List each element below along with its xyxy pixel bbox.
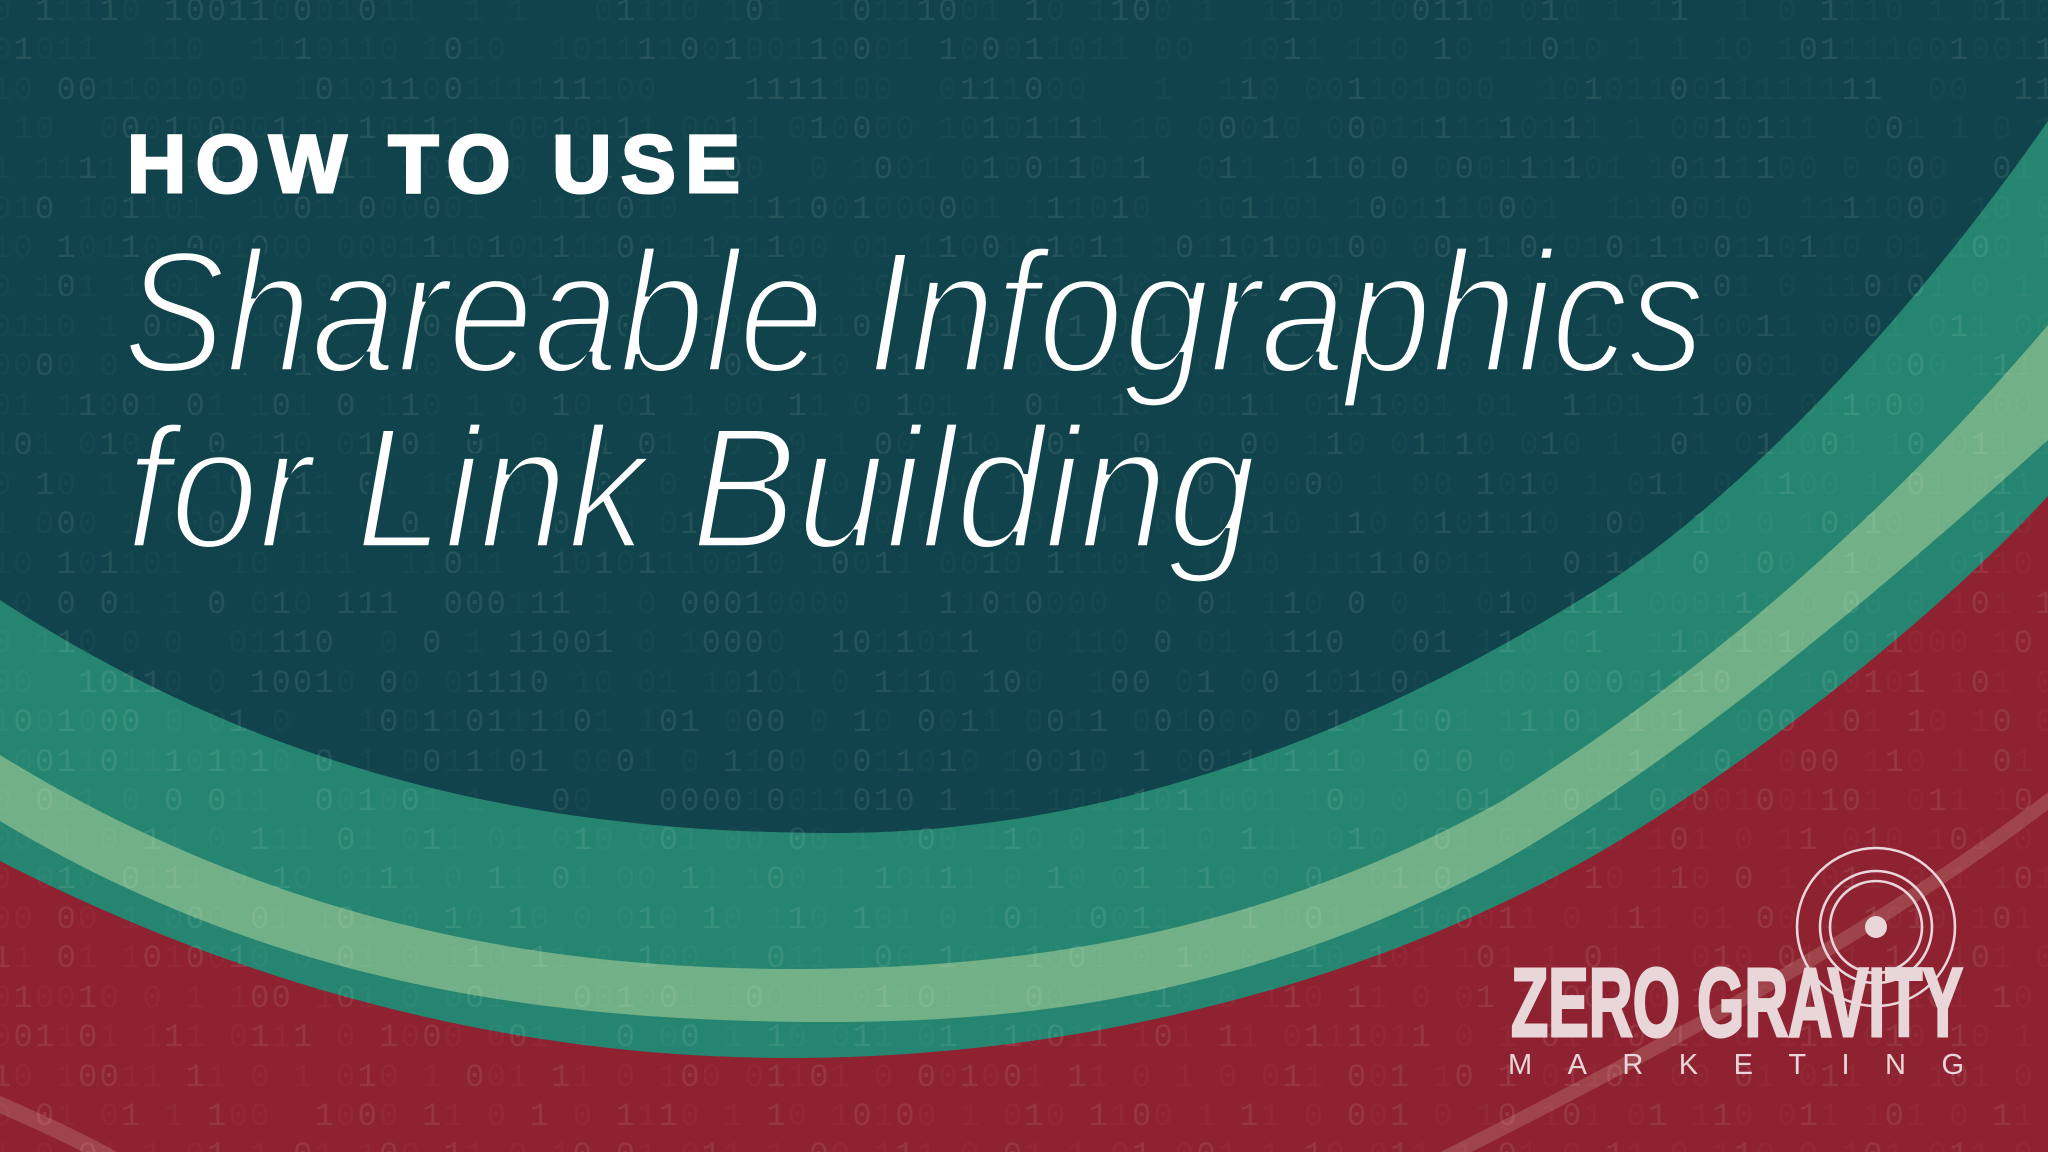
title: line one: Shareable Infographics xyxy=(123,214,1705,409)
logo subline: MARKETING xyxy=(1508,1049,1964,1081)
dark teal field xyxy=(0,0,2048,833)
heading: how to use: HOW TO USE xyxy=(127,119,740,210)
title: line two: for Link Building xyxy=(126,390,1256,585)
swoosh: faint arc bottom left xyxy=(0,1100,115,1152)
icon: logo target circles xyxy=(1797,848,1955,1006)
swoosh: faint arc bottom right xyxy=(1440,795,2048,1152)
logo: zero gravity marketing xyxy=(1508,848,1964,1081)
